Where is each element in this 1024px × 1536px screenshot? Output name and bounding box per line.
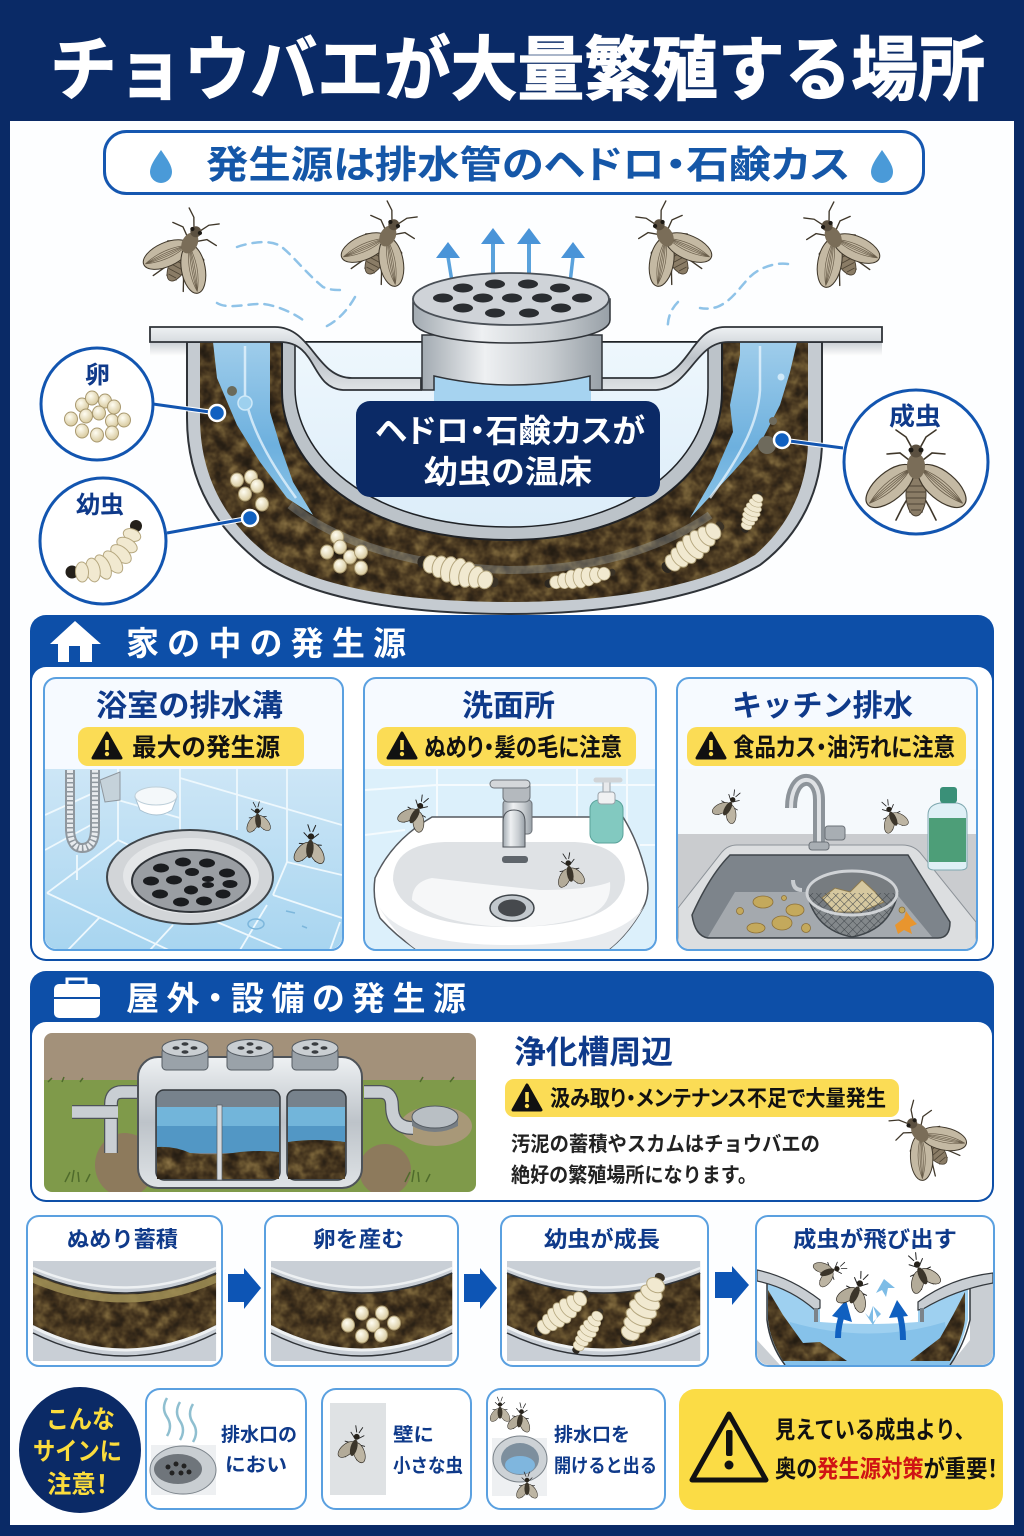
card: washroom: 洗面所	[462, 690, 555, 723]
heading: 家の中の発生源	[126, 625, 406, 662]
shadow below flanges	[150, 342, 187, 356]
septic fly	[873, 1086, 978, 1191]
muck	[768, 1290, 847, 1361]
sign card: flies from drain: 開けると出る	[554, 1455, 657, 1477]
inner hollow	[295, 342, 708, 527]
center label	[356, 401, 660, 497]
tank chamber right	[287, 1090, 346, 1180]
arrow 3	[715, 1266, 749, 1305]
water below drain	[434, 375, 591, 401]
water	[767, 1280, 968, 1365]
badge: warning signs: 注意！	[47, 1471, 108, 1499]
septic description: 絶好の繁殖場所になります。	[511, 1164, 757, 1187]
callout: final warning	[679, 1389, 1003, 1510]
sign card: smell	[146, 1389, 306, 1509]
center label: ヘドロ・石鹸カスが	[375, 413, 645, 449]
eggs in sludge, left	[230, 470, 268, 511]
panel: home sources	[30, 615, 994, 961]
card: washroom	[364, 678, 656, 950]
card: bathroom	[44, 678, 343, 952]
water highlights	[245, 346, 760, 498]
shower hose	[70, 770, 95, 848]
center label: 幼虫の温床	[424, 454, 592, 490]
sink basin	[374, 817, 648, 950]
inspection cover	[412, 1106, 458, 1132]
upward arrows	[436, 228, 585, 300]
grass tufts	[48, 1077, 454, 1182]
eggs in sludge, bottom	[320, 530, 368, 575]
title: チョウバエが大量繁殖する場所	[50, 31, 985, 109]
step 2	[265, 1216, 458, 1366]
sign card: smell: におい	[225, 1454, 287, 1476]
step 2: 卵を産む	[313, 1227, 404, 1252]
callout: adult fly: 成虫	[889, 403, 941, 431]
card: bathroom: 最大の発生源	[132, 734, 280, 762]
outer grey	[757, 1280, 993, 1365]
step 3: 幼虫が成長	[544, 1227, 660, 1252]
step 1: ぬめり蓄積	[67, 1227, 178, 1252]
signs section	[19, 1387, 1003, 1513]
bottle	[928, 787, 967, 870]
sign card: flies from drain	[487, 1389, 665, 1509]
icon: water drop right	[871, 150, 893, 183]
dashed flight paths	[217, 242, 788, 330]
overflow slot	[502, 856, 528, 863]
callout: final warning: 奥の発生源対策が重要！	[775, 1455, 998, 1483]
floor drain	[107, 830, 273, 924]
badge: warning signs: こんな	[46, 1406, 115, 1434]
septic warning	[505, 1079, 899, 1117]
main drain cross-section diagram	[40, 190, 988, 614]
septic description	[511, 1133, 820, 1187]
sign card: smell: 排水口の	[221, 1424, 297, 1446]
sludge layer	[200, 342, 808, 602]
water right	[690, 342, 797, 518]
strainer basket	[807, 871, 898, 937]
card: kitchen: キッチン排水	[732, 690, 913, 723]
bubbles and debris	[227, 374, 784, 454]
larvae in sludge	[414, 488, 768, 597]
food scraps	[736, 896, 905, 933]
faucet	[490, 780, 532, 847]
right inlet pipe	[364, 1092, 413, 1128]
step 3	[501, 1216, 708, 1366]
icon: toolbox	[54, 979, 100, 1018]
cup	[135, 787, 177, 815]
callout: larva: 幼虫	[76, 492, 124, 519]
sign card: wall fly: 壁に	[393, 1424, 434, 1446]
callout: egg	[41, 348, 225, 460]
icon: water drop left	[150, 150, 172, 183]
emerging flies	[809, 1251, 851, 1291]
washroom flies	[397, 794, 429, 833]
card: bathroom: 浴室の排水溝	[96, 690, 283, 723]
soil patches	[95, 1106, 472, 1197]
tank lids	[162, 1040, 338, 1070]
inner pipe band	[282, 342, 722, 540]
soap bottle	[590, 780, 623, 843]
callout: egg: 卵	[85, 362, 110, 389]
left outlet pipe	[72, 1092, 137, 1153]
flies rising	[132, 190, 891, 304]
arrow 1	[228, 1268, 261, 1309]
callout: larva	[40, 478, 258, 604]
badge: warning signs: サインに	[33, 1438, 122, 1466]
water left	[213, 342, 313, 515]
card: washroom: ぬめり・髪の毛に注意	[424, 734, 622, 762]
card: kitchen: 食品カス・油汚れに注意	[733, 734, 955, 762]
curved larva	[66, 520, 143, 583]
callout: adult fly	[774, 390, 988, 534]
step 1	[27, 1216, 222, 1366]
grey-blue streak in sludge	[290, 505, 710, 570]
drain cylinder	[422, 335, 602, 390]
kitchen flies	[712, 789, 740, 824]
subtitle banner	[104, 132, 924, 194]
basin drain	[490, 895, 534, 921]
sink stub pipe	[793, 880, 802, 890]
warning text: 見えている成虫より、	[775, 1417, 975, 1444]
basin front shade	[378, 905, 645, 950]
rising arrows	[832, 1279, 908, 1340]
septic description: 汚泥の蓄積やスカムはチョウバエの	[511, 1133, 820, 1156]
bathroom flies	[246, 801, 271, 832]
top flange pipe	[150, 327, 421, 390]
tank body	[138, 1057, 362, 1188]
process flow	[27, 1216, 994, 1366]
icon: house	[50, 621, 101, 662]
step 4: 成虫が飛び出す	[793, 1227, 957, 1252]
arrow 2	[464, 1268, 497, 1309]
tank chamber left	[156, 1090, 280, 1180]
water droplets	[248, 911, 307, 929]
septic tank illustration	[44, 1033, 476, 1197]
sign card: wall fly: 小さな虫	[393, 1455, 463, 1477]
subtitle text: 発生源は排水管のヘドロ・石鹸カス	[206, 145, 850, 187]
icon: warning triangle	[692, 1414, 766, 1480]
heading: 屋外・設備の発生源	[126, 980, 466, 1017]
septic warning: 汲み取り・メンテナンス不足で大量発生	[550, 1086, 886, 1111]
kitchen faucet	[791, 780, 845, 850]
hose bracket	[100, 772, 120, 802]
step 4	[756, 1216, 994, 1366]
card: kitchen	[677, 678, 977, 950]
sign card: flies from drain: 排水口を	[554, 1424, 630, 1446]
panel: outdoor sources	[30, 971, 994, 1202]
septic heading: 浄化槽周辺	[514, 1034, 673, 1070]
orange peel	[895, 911, 917, 934]
drain cap	[413, 273, 610, 343]
badge: warning signs	[19, 1387, 141, 1513]
pipe walls	[767, 1280, 785, 1365]
bowl	[393, 842, 625, 927]
outer pipe	[187, 342, 822, 614]
sign card: wall fly	[322, 1389, 471, 1509]
